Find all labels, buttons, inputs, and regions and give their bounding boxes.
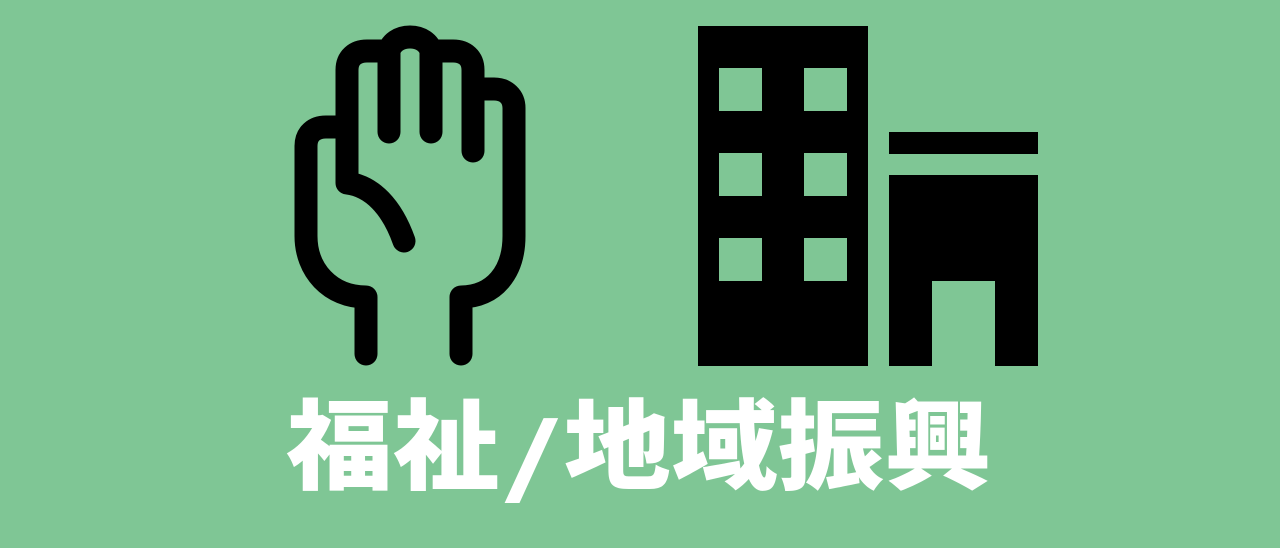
title: / <box>499 399 563 524</box>
icon: buildings <box>698 26 1038 366</box>
title: 福祉 <box>286 392 500 502</box>
title: 地域振興 <box>564 392 991 502</box>
icon: raised hand <box>306 37 514 354</box>
